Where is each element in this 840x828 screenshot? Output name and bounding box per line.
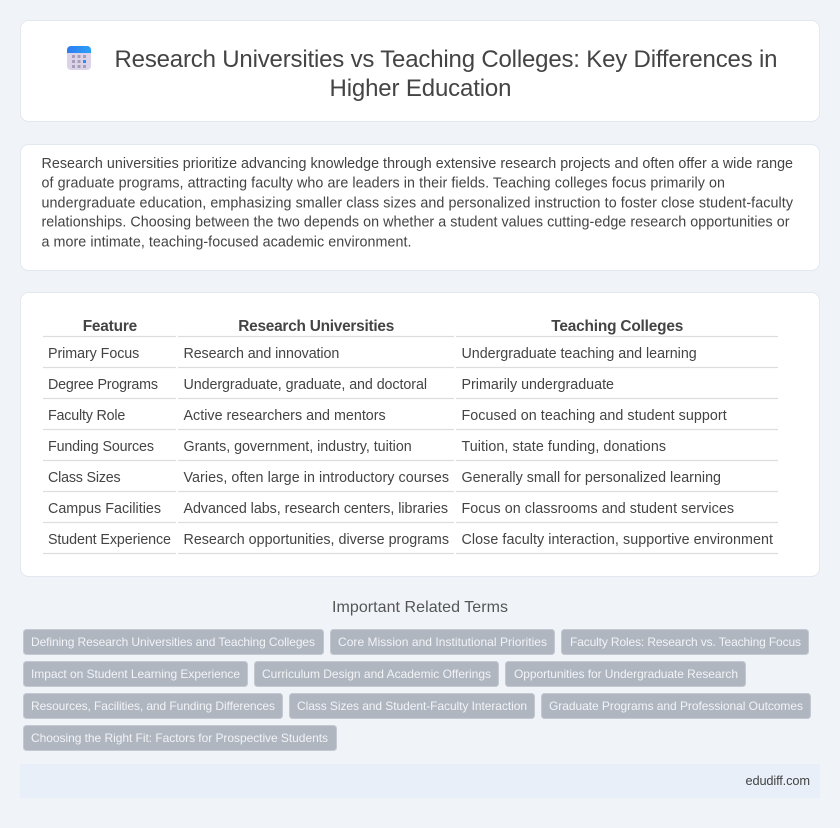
title: Higher Education <box>330 75 512 102</box>
row: faculty role: Faculty Role <box>48 408 125 424</box>
tag <box>24 726 336 750</box>
row: student experience: Student Experience <box>48 532 171 548</box>
row: student experience: Research opportunities, diverse programs <box>184 532 449 548</box>
tag: Defining Research Universities and Teaching Colleges <box>31 635 315 649</box>
row: degree programs: Degree Programs <box>48 377 158 393</box>
panel: introduction paragraph: undergraduate education, emphasizing smaller class sizes and personalized instruction to foster close student-faculty <box>42 196 794 212</box>
tag: Core Mission and Institutional Priorities <box>338 635 547 649</box>
tag: Curriculum Design and Academic Offerings <box>262 667 491 681</box>
tag <box>506 662 746 686</box>
row: funding sources <box>48 439 666 455</box>
row: faculty role: Active researchers and mentors <box>184 408 386 424</box>
row: campus facilities: Campus Facilities <box>48 501 161 517</box>
panel: header <box>20 20 820 122</box>
row: class sizes <box>48 470 721 486</box>
tag <box>24 630 324 654</box>
heading: important related terms: Important Related Terms <box>332 599 508 616</box>
row: campus facilities: Advanced labs, research centers, libraries <box>184 501 448 517</box>
panel: introduction paragraph: a more intimate, teaching-focused academic environment. <box>42 234 412 250</box>
row: primary focus: Primary Focus <box>48 346 139 362</box>
tag: Opportunities for Undergraduate Research <box>514 667 738 681</box>
tag: Impact on Student Learning Experience <box>31 667 240 681</box>
row: class sizes: Class Sizes <box>48 470 121 486</box>
tag <box>562 630 808 654</box>
tag: Class Sizes and Student-Faculty Interaction <box>297 699 527 713</box>
table header row <box>83 318 683 335</box>
tag <box>290 694 534 718</box>
tag <box>542 694 810 718</box>
footer: edudiff.com <box>746 773 810 788</box>
table header row: Teaching Colleges <box>551 318 683 335</box>
row: campus facilities <box>48 501 734 517</box>
title: Research Universities vs Teaching Colleges: Key Differences in <box>114 46 778 73</box>
row: campus facilities: Focus on classrooms and student services <box>462 501 734 517</box>
panel: introduction paragraph: relationships. Choosing between the two depends on whether a student values cutting-edge research opportunities or <box>42 214 790 230</box>
row: degree programs <box>48 377 614 393</box>
row: student experience: Close faculty interaction, supportive environment <box>462 532 773 548</box>
row: primary focus <box>48 346 697 362</box>
tag: Choosing the Right Fit: Factors for Prospective Students <box>31 731 328 745</box>
panel: introduction paragraph: Research universities prioritize advancing knowledge through extensive research projects and often offer a wide range <box>42 156 793 172</box>
row: funding sources: Funding Sources <box>48 439 154 455</box>
row: student experience <box>48 532 773 548</box>
table header row: Research Universities <box>238 318 394 335</box>
tag <box>24 694 282 718</box>
tag <box>330 630 554 654</box>
row: faculty role <box>48 408 727 424</box>
tag <box>254 662 498 686</box>
related terms tags <box>24 630 810 750</box>
panel: introduction paragraph <box>20 144 820 270</box>
row: faculty role: Focused on teaching and student support <box>462 408 727 424</box>
footer <box>20 764 820 798</box>
table header row: Feature <box>83 318 138 335</box>
tag: Resources, Facilities, and Funding Differences <box>31 699 275 713</box>
row: degree programs: Primarily undergraduate <box>462 377 614 393</box>
row: primary focus: Undergraduate teaching and learning <box>462 346 697 362</box>
row: funding sources: Grants, government, industry, tuition <box>184 439 412 455</box>
tag: Faculty Roles: Research vs. Teaching Focus <box>570 635 801 649</box>
panel: introduction paragraph: of graduate programs, attracting faculty who are leaders in their fields. Teaching colleges focus primarily on <box>42 176 725 192</box>
tag: Graduate Programs and Professional Outcomes <box>549 699 803 713</box>
row: degree programs: Undergraduate, graduate, and doctoral <box>184 377 427 393</box>
row: class sizes: Varies, often large in introductory courses <box>184 470 449 486</box>
row: class sizes: Generally small for personalized learning <box>462 470 721 486</box>
icon: calendar <box>67 46 91 70</box>
tag <box>24 662 248 686</box>
row: funding sources: Tuition, state funding, donations <box>462 439 666 455</box>
panel: comparison table <box>20 292 820 576</box>
row: primary focus: Research and innovation <box>184 346 339 362</box>
title <box>114 46 778 102</box>
